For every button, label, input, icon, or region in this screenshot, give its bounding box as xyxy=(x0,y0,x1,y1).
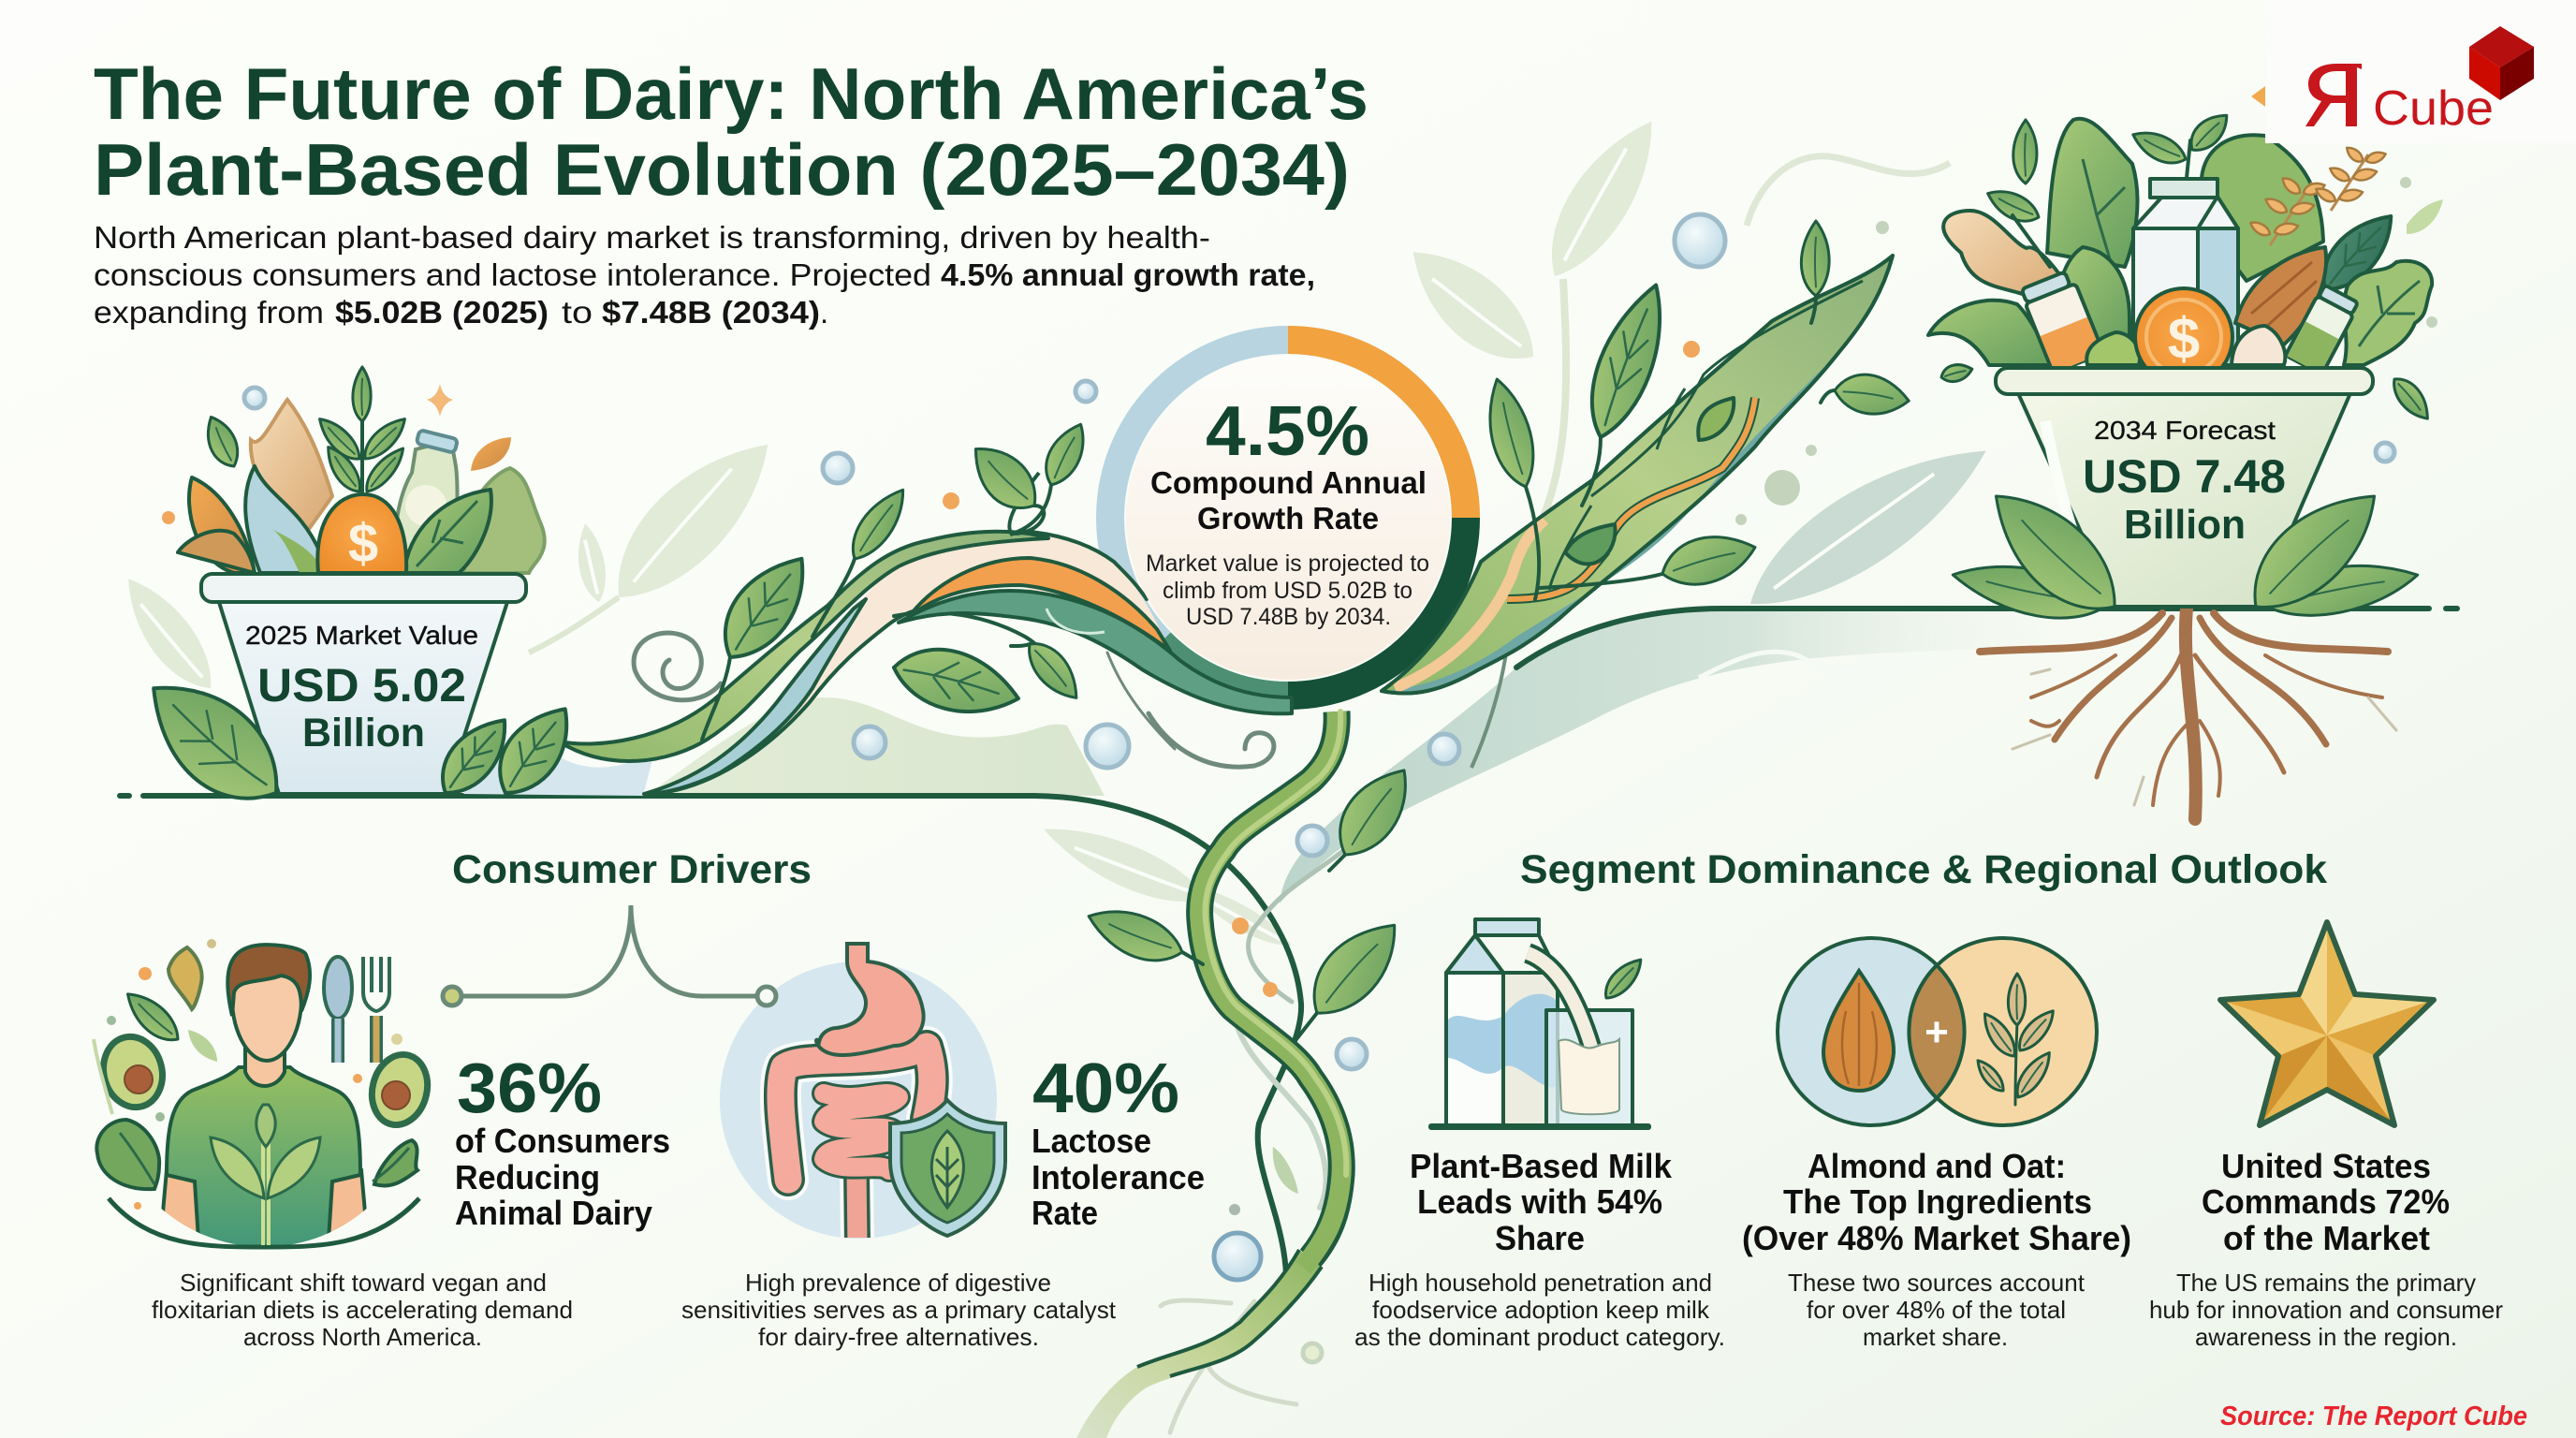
2025 bowl produce xyxy=(178,367,545,574)
heading: plant-based milk: Share xyxy=(1495,1219,1585,1257)
blue band xyxy=(644,599,866,794)
connector: consumer drivers bracket xyxy=(443,905,776,1005)
stat label: 40%: Intolerance xyxy=(1032,1158,1205,1196)
ring chart background arcs xyxy=(1110,340,1466,696)
2034 value label xyxy=(2083,416,2286,548)
left hill under the ground line xyxy=(646,697,1105,796)
intro text: $7.48B (2034) xyxy=(602,295,820,330)
avocados xyxy=(96,1031,434,1131)
left ground line xyxy=(117,793,1301,1306)
title: The Future of Dairy: North America’s xyxy=(94,52,1368,135)
stat label: 40%: Rate xyxy=(1032,1194,1098,1232)
description: vegan shift: Significant shift toward vegan and xyxy=(180,1269,547,1297)
title xyxy=(94,52,1368,211)
description: vegan shift: floxitarian diets is accelerating demand xyxy=(152,1296,573,1324)
intro text: conscious consumers and lactose intolerance. Projected xyxy=(94,257,931,292)
source note: Source: The Report Cube xyxy=(2220,1401,2527,1431)
description: united states: The US remains the primary xyxy=(2176,1269,2476,1297)
description: plant-based milk: High household penetration and xyxy=(1368,1269,1712,1297)
logo mark: mirrored R xyxy=(2305,64,2362,126)
intro text: 4.5% annual growth rate, xyxy=(941,257,1315,292)
intro text: . xyxy=(820,295,828,330)
vine tendrils xyxy=(634,633,1348,1432)
background: faded foliage xyxy=(110,105,2005,956)
2034 value label: Billion xyxy=(2124,502,2246,548)
icon: almond and oat venn: + xyxy=(1925,1009,1949,1055)
icon: milk carton and glass xyxy=(1428,919,1651,1130)
2034 bowl body xyxy=(2018,393,2350,607)
heading: segment dominance: Segment Dominance & Regional Outlook xyxy=(1520,847,2327,892)
2034 roots xyxy=(1980,609,2396,819)
heading: plant-based milk: Plant-Based Milk xyxy=(1410,1147,1673,1185)
2025 value label xyxy=(245,621,478,756)
2034 value label: 2034 Forecast xyxy=(2094,416,2276,445)
description: plant-based milk: foodservice adoption keep milk xyxy=(1372,1296,1710,1324)
heading: almond and oat xyxy=(1742,1147,2131,1257)
decorative bubbles and dots xyxy=(162,86,2437,1362)
2025 bowl leaves xyxy=(126,660,585,825)
icon: almond and oat venn xyxy=(1778,938,2097,1125)
description: vegan shift: across North America. xyxy=(243,1323,482,1351)
CAGR label: Compound Annual xyxy=(1150,465,1427,500)
heading: united states: Commands 72% xyxy=(2202,1182,2450,1221)
CAGR description: climb from USD 5.02B to xyxy=(1163,578,1412,604)
segment: plant-based milk xyxy=(1354,1147,1725,1351)
cream band xyxy=(655,532,1170,794)
heading: plant-based milk xyxy=(1410,1147,1673,1257)
segment: almond and oat xyxy=(1742,1147,2131,1351)
stat label: 40% xyxy=(1032,1122,1205,1232)
icon: gold star xyxy=(2220,922,2434,1125)
2025 value label: USD 5.02 xyxy=(257,659,466,712)
green band xyxy=(559,532,1048,761)
CAGR label: Growth Rate xyxy=(1197,501,1379,536)
stat label: 36%: of Consumers xyxy=(455,1122,670,1160)
stat: 40%: 40% xyxy=(1032,1049,1179,1127)
description: almond and oat xyxy=(1788,1269,2086,1351)
heading: united states xyxy=(2202,1147,2450,1257)
title: Plant-Based Evolution (2025–2034) xyxy=(94,128,1350,211)
right ground swoosh xyxy=(1280,606,2460,903)
description: almond and oat: market share. xyxy=(1863,1323,2008,1351)
intro text: North American plant-based dairy market is transforming, driven by health- xyxy=(94,220,1210,255)
intro text: to xyxy=(562,295,593,330)
stat label: 40%: Lactose xyxy=(1032,1122,1151,1160)
2025 bowl produce: $ xyxy=(348,513,378,574)
intro text xyxy=(94,220,1315,330)
almond xyxy=(1823,971,1894,1091)
2034 value label: USD 7.48 xyxy=(2083,450,2286,503)
description: almond and oat: These two sources account xyxy=(1788,1269,2086,1297)
vine leaves xyxy=(1081,756,1424,1194)
heading: plant-based milk: Leads with 54% xyxy=(1417,1182,1662,1221)
description: united states xyxy=(2149,1269,2503,1351)
description: united states: awareness in the region. xyxy=(2195,1323,2457,1351)
description: digestive sensitivities xyxy=(681,1269,1117,1351)
heading: almond and oat: The Top Ingredients xyxy=(1783,1182,2092,1221)
description: digestive sensitivities: sensitivities serves as a primary catalyst xyxy=(681,1296,1117,1324)
description: digestive sensitivities: for dairy-free alternatives. xyxy=(758,1323,1039,1351)
market 2034 bowl xyxy=(1928,107,2443,819)
oat sprig xyxy=(1972,974,2059,1105)
2034 bowl produce: $ xyxy=(2168,307,2200,372)
2025 value label: 2025 Market Value xyxy=(245,621,478,650)
heading: almond and oat: Almond and Oat: xyxy=(1808,1147,2066,1185)
2034 bowl produce xyxy=(1928,107,2443,425)
description: united states: hub for innovation and consumer xyxy=(2149,1296,2503,1324)
heading: consumer drivers: Consumer Drivers xyxy=(452,847,812,892)
flowing ribbon: left xyxy=(463,473,1292,796)
flowing ribbon: right xyxy=(1382,256,1893,694)
central vine xyxy=(1076,712,1424,1438)
description: digestive sensitivities: High prevalence of digestive xyxy=(745,1269,1051,1297)
heading: united states: United States xyxy=(2221,1147,2431,1185)
2025 bowl body xyxy=(218,599,508,794)
market 2025 bowl xyxy=(126,367,585,825)
CAGR value: 4.5% xyxy=(1206,391,1369,470)
stat label: 36%: Animal Dairy xyxy=(455,1194,652,1232)
stat: 36% xyxy=(455,1049,670,1232)
logo wordmark: Cube xyxy=(2373,81,2494,136)
side leaves along ribbons xyxy=(702,221,1911,740)
ring inner disc xyxy=(1126,356,1450,680)
logo xyxy=(2265,0,2576,143)
stat label: 36%: Reducing xyxy=(455,1158,600,1196)
2034 bowl leaves xyxy=(1948,471,2422,632)
2025 value label: Billion xyxy=(302,711,425,756)
CAGR callout xyxy=(1126,356,1450,680)
intro text: expanding from xyxy=(94,295,324,330)
stat: 36%: 36% xyxy=(457,1049,602,1127)
description: almond and oat: for over 48% of the total xyxy=(1807,1296,2066,1324)
stat label: 36% xyxy=(455,1122,670,1232)
CAGR label xyxy=(1150,465,1427,536)
description: plant-based milk: as the dominant product category. xyxy=(1354,1323,1725,1351)
intro text: $5.02B (2025) xyxy=(335,295,549,330)
CAGR description: USD 7.48B by 2034. xyxy=(1186,604,1391,630)
description: plant-based milk xyxy=(1354,1269,1725,1351)
wheat sprigs xyxy=(2248,144,2387,245)
logo cube xyxy=(2469,26,2534,100)
stat: 40% xyxy=(1032,1049,1205,1232)
segment: united states xyxy=(2149,1147,2503,1351)
heading: united states: of the Market xyxy=(2223,1219,2430,1257)
CAGR description xyxy=(1146,550,1429,630)
icon: person with plant diet xyxy=(94,939,434,1255)
heading: almond and oat: (Over 48% Market Share) xyxy=(1742,1219,2131,1257)
icon: digestive system with shield xyxy=(720,944,1005,1245)
CAGR description: Market value is projected to xyxy=(1146,550,1429,577)
description: vegan shift xyxy=(152,1269,573,1351)
